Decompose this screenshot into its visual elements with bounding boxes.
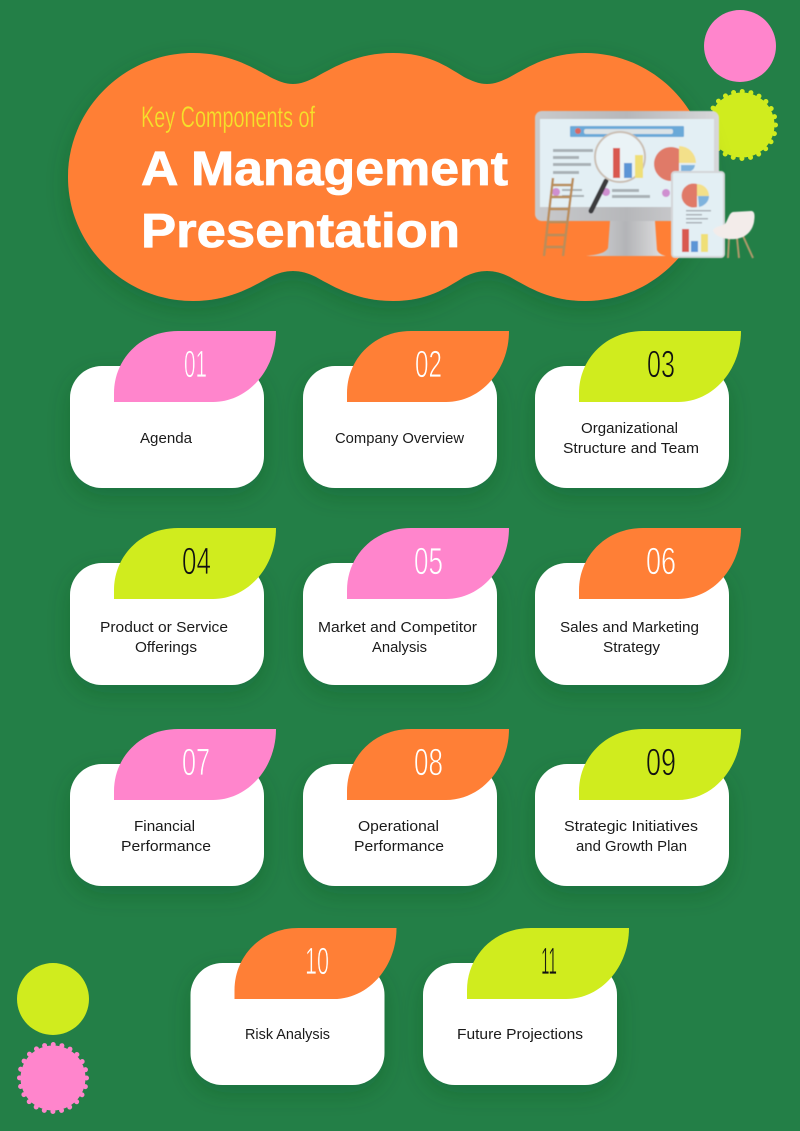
card 06: Sales and Marketing xyxy=(560,620,699,636)
card 09 xyxy=(535,729,741,886)
card 04: Product or Service xyxy=(100,620,228,636)
card 03: Organizational xyxy=(581,421,678,437)
card 07: 07 xyxy=(182,742,210,784)
card 03 xyxy=(535,331,741,488)
card 10: Risk Analysis xyxy=(245,1027,330,1043)
magnifier xyxy=(591,132,645,211)
card 11: Future Projections xyxy=(457,1027,583,1043)
card 07 xyxy=(70,729,276,886)
card 06: Strategy xyxy=(603,640,661,656)
decoration: lime gear top right xyxy=(708,92,776,158)
chair xyxy=(713,211,755,258)
card 03: Structure and Team xyxy=(563,441,699,457)
card 03: 03 xyxy=(647,344,675,386)
card 08 xyxy=(303,729,509,886)
card 02: 02 xyxy=(415,344,442,386)
card 10 xyxy=(190,928,396,1085)
header blob xyxy=(68,53,709,301)
card 10: 10 xyxy=(305,941,329,983)
card 07: Performance xyxy=(121,839,211,855)
card 04 xyxy=(70,528,276,685)
card 05: Market and Competitor xyxy=(318,620,477,636)
title xyxy=(141,143,508,258)
decoration: pink circle top right xyxy=(704,10,776,82)
tablet xyxy=(672,172,724,257)
card 05 xyxy=(303,528,509,685)
card 06: 06 xyxy=(646,541,676,583)
card 01: 01 xyxy=(184,344,207,386)
card 09: 09 xyxy=(646,742,676,784)
card 09: and Growth Plan xyxy=(576,839,687,855)
card 08: 08 xyxy=(414,742,443,784)
card 01 xyxy=(70,331,276,488)
monitor xyxy=(535,111,719,256)
card 05: Analysis xyxy=(372,640,427,656)
card 02: Company Overview xyxy=(335,431,465,447)
title: A Management xyxy=(141,143,508,196)
card 11 xyxy=(423,928,629,1085)
ladder xyxy=(544,178,573,256)
subtitle: Key Components of xyxy=(141,101,315,134)
card 08: Performance xyxy=(354,839,444,855)
card 08: Operational xyxy=(358,819,439,835)
decoration: lime circle bottom left xyxy=(17,963,89,1035)
card 11: 11 xyxy=(541,941,557,983)
illustration: computer with charts xyxy=(535,111,755,258)
card 01: Agenda xyxy=(140,431,193,447)
card 04: Offerings xyxy=(135,640,197,656)
card 05: 05 xyxy=(414,541,443,583)
card 09: Strategic Initiatives xyxy=(564,819,698,835)
card 02 xyxy=(303,331,509,488)
card 06 xyxy=(535,528,741,685)
card 07: Financial xyxy=(134,819,195,835)
decoration: pink gear bottom left xyxy=(20,1044,86,1112)
card 04: 04 xyxy=(182,541,211,583)
screen pie chart xyxy=(654,146,696,181)
title: Presentation xyxy=(141,205,460,258)
